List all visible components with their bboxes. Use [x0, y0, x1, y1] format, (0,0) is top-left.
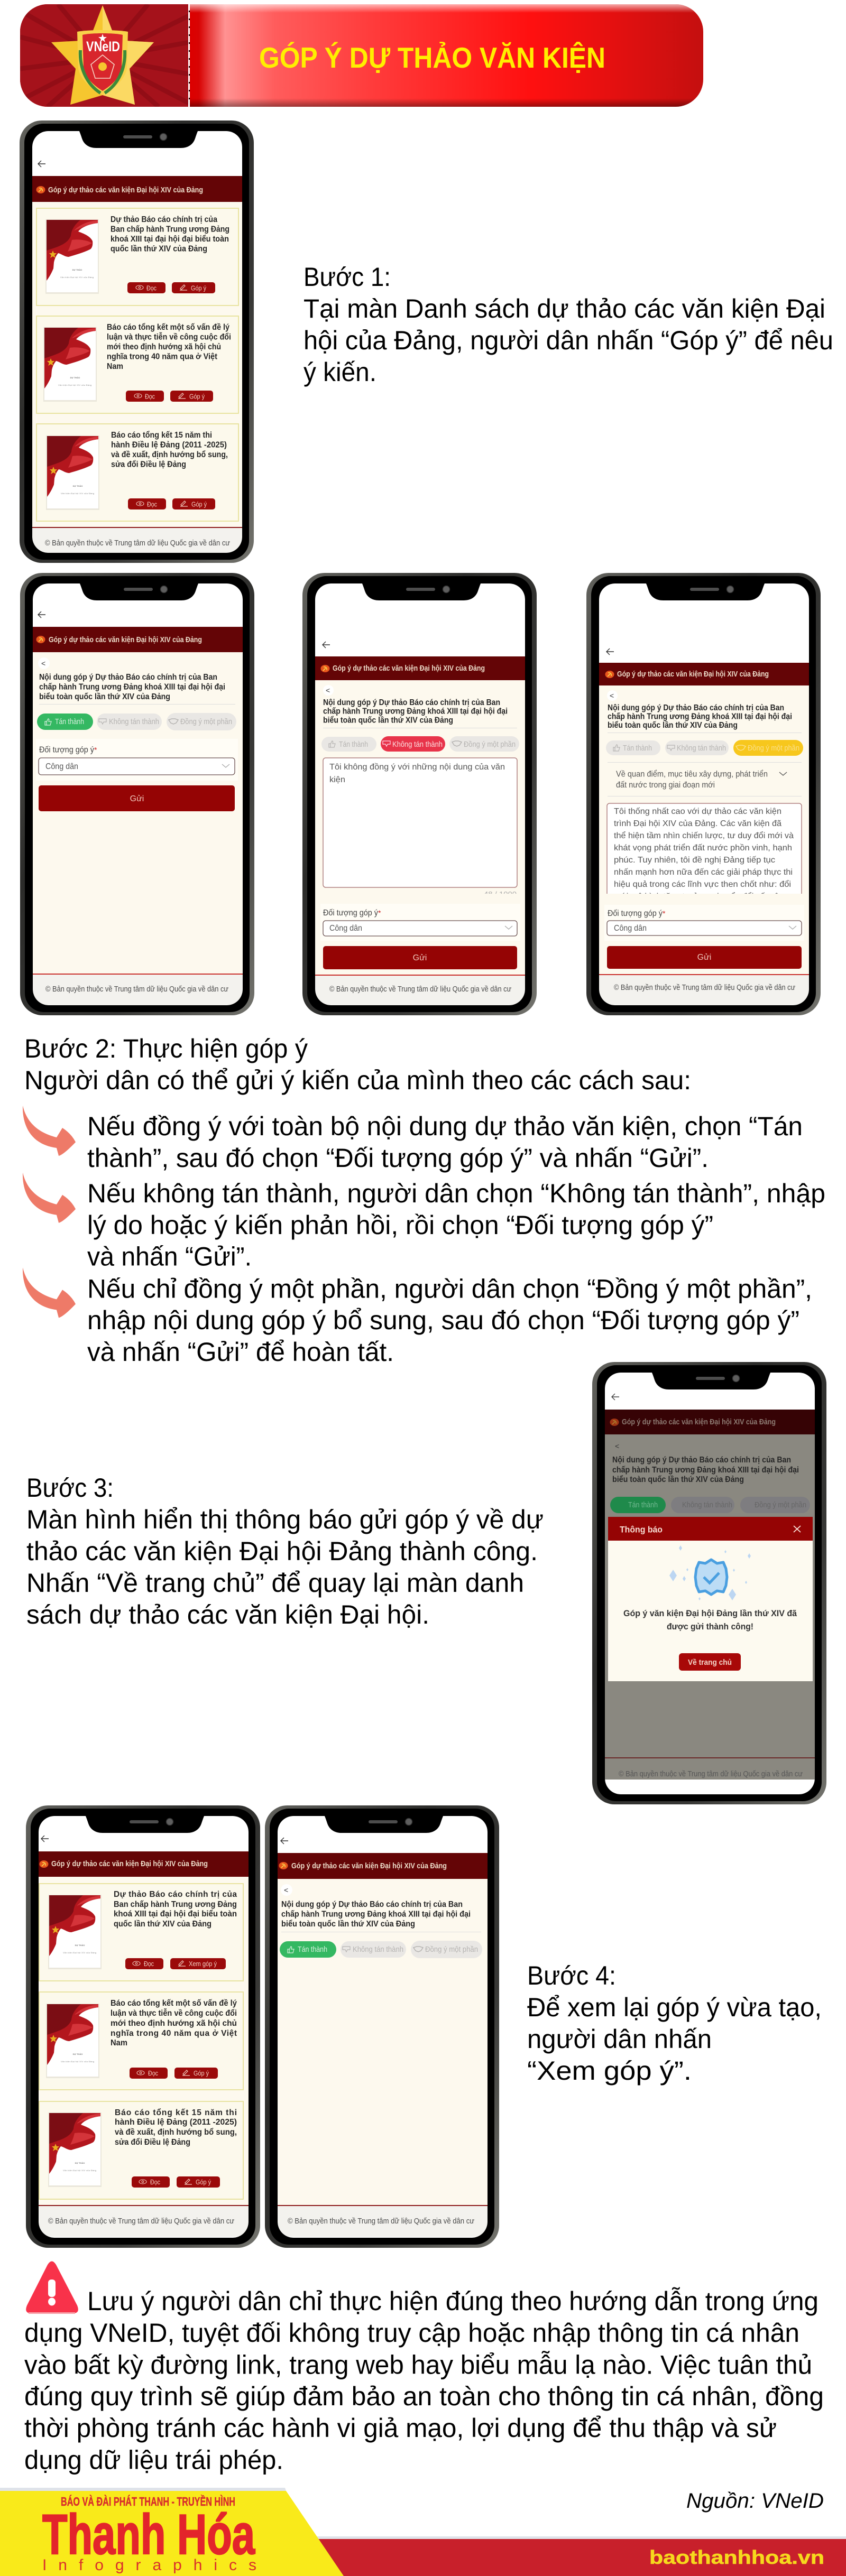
text: option disagree: Nếu không tán thành, người dân chọn “Không tán thành”, nhập	[87, 1179, 825, 1208]
app header bar	[33, 627, 243, 652]
text: option disagree: lý do hoặc ý kiến phản hồi, rồi chọn “Đối tượng góp ý”	[87, 1210, 713, 1240]
app footer: © Bản quyền thuộc về Trung tâm dữ liệu Quốc gia về dân cư	[45, 985, 228, 994]
form title: biểu toàn quốc lần thứ XIV của Đảng	[323, 716, 453, 725]
app header bar: Góp ý dự thảo các văn kiện Đại hội XIV của Đảng	[51, 1859, 208, 1868]
comment textarea: Tôi thống nhất cao với dự thảo các văn kiện	[614, 807, 781, 816]
dimmed pills	[610, 1497, 810, 1513]
icon: warning triangle	[26, 2261, 78, 2314]
card: party charter report: Văn kiện Đại hội XIV của Đảng	[61, 492, 94, 495]
section selector: đất nước trong giai đoạn mới	[616, 781, 715, 790]
target selector: Đối tượng góp ý	[39, 745, 94, 755]
title banner	[20, 4, 703, 107]
card: party charter report	[39, 2101, 243, 2199]
target selector: *	[378, 909, 381, 917]
dimmed pills: Không tán thành	[682, 1501, 732, 1509]
option pills: Đồng ý một phần	[180, 718, 232, 726]
text: step 3: thảo các văn kiện Đại hội Đảng thành công.	[26, 1536, 538, 1566]
app footer: © Bản quyền thuộc về Trung tâm dữ liệu Quốc gia về dân cư	[329, 985, 511, 994]
option pills	[606, 740, 803, 756]
text: warning note	[24, 2286, 824, 2475]
icon: VNeID star emblem	[51, 5, 154, 105]
card: 40 years report	[39, 1992, 243, 2090]
card: political report: khoá XIII tại đại hội đại biểu toàn	[111, 235, 229, 244]
card: political report: Đọc	[144, 1960, 154, 1968]
send button	[39, 785, 235, 811]
card: political report: quốc lần thứ XIV của Đảng	[111, 244, 207, 254]
target selector	[36, 739, 238, 781]
card: 40 years report	[36, 316, 238, 413]
card: political report: DỰ THẢO	[75, 1944, 85, 1947]
card: political report: Đọc	[146, 284, 157, 292]
app footer: © Bản quyền thuộc về Trung tâm dữ liệu Quốc gia về dân cư	[45, 539, 230, 548]
card: 40 years report: Góp ý	[194, 2069, 209, 2077]
card: 40 years report: Đọc	[145, 392, 155, 401]
dimmed header bar	[605, 1410, 815, 1434]
app footer: © Bản quyền thuộc về Trung tâm dữ liệu Quốc gia về dân cư	[48, 2217, 234, 2226]
phone: success dialog	[592, 1362, 826, 1804]
app footer: © Bản quyền thuộc về Trung tâm dữ liệu Quốc gia về dân cư	[614, 984, 795, 992]
icon: VNeID star emblem: VNeID	[86, 39, 120, 54]
phone: submitted comment view	[265, 1805, 499, 2248]
text: step 1: ý kiến.	[304, 357, 376, 387]
text: step 1	[304, 262, 833, 387]
card: party charter report: hành Điều lệ Đảng (2011 -2025)	[115, 2118, 237, 2127]
app footer	[277, 2205, 488, 2237]
form title: biểu toàn quốc lần thứ XIV của Đảng	[39, 692, 170, 701]
logo text: Thanh Hóa	[42, 2503, 255, 2566]
text: step 3: Nhấn “Về trang chủ” để quay lại màn danh	[26, 1568, 524, 1598]
comment textarea: trình Đại hội XIV của Đảng. Các văn kiện đã	[614, 819, 781, 828]
section selector	[616, 770, 787, 790]
card: political report: quốc lần thứ XIV của Đảng	[114, 1920, 212, 1929]
app header bar	[277, 1853, 488, 1879]
card: party charter report: Báo cáo tổng kết 15 năm thi	[111, 431, 212, 440]
option pills: Không tán thành	[677, 744, 726, 753]
comment textarea: khát vọng phát triển đất nước phồn vinh, hạnh	[614, 843, 792, 853]
app footer	[599, 974, 809, 1005]
form title: Nội dung góp ý Dự thảo Báo cáo chính trị của Ban	[281, 1900, 463, 1909]
dialog: Về trang chủ	[688, 1658, 732, 1667]
comment textarea: hiệu quả trong các lĩnh vực then chốt như: đổi	[614, 879, 791, 889]
comment textarea: thể hiện tầm nhìn chiến lược, tư duy đổi mới và	[614, 831, 794, 840]
send button: Gửi	[697, 953, 711, 962]
target selector: *	[663, 909, 666, 918]
card: 40 years report: nghĩa trong 40 năm qua ở Việt	[107, 352, 217, 362]
dimmed title	[612, 1456, 799, 1484]
text: warning note: thời phòng tránh các hành vi giả mạo, lợi dụng để thu thập và sử	[24, 2413, 777, 2443]
text: step 2 intro: Bước 2: Thực hiện góp ý	[24, 1034, 308, 1063]
card: 40 years report: Văn kiện Đại hội XIV của Đảng	[58, 384, 91, 386]
option pills: Đồng ý một phần	[425, 1945, 478, 1954]
send button: Gửi	[130, 794, 144, 803]
text: option partial: Nếu chỉ đồng ý một phần, người dân chọn “Đồng ý một phần”,	[87, 1274, 812, 1303]
form title: Nội dung góp ý Dự thảo Báo cáo chính trị của Ban	[323, 698, 500, 707]
target selector: *	[94, 745, 97, 754]
dimmed title: chấp hành Trung ương Đảng khoá XIII tại đại hội đại	[612, 1466, 799, 1475]
text: step 3	[26, 1473, 544, 1629]
card: 40 years report: luận và thực tiễn về công cuộc đổi	[111, 2009, 237, 2018]
card: political report: Dự thảo Báo cáo chính trị của	[114, 1890, 237, 1899]
logo text: BÁO VÀ ĐÀI PHÁT THANH - TRUYỀN HÌNH	[61, 2494, 235, 2508]
heading: GÓP Ý DỰ THẢO VĂN KIỆN	[259, 41, 605, 74]
app header bar	[32, 176, 242, 202]
form title: Nội dung góp ý Dự thảo Báo cáo chính trị của Ban	[39, 673, 217, 682]
card: party charter report: hành Điều lệ Đảng (2011 -2025)	[111, 441, 227, 449]
text: step 4: người dân nhấn	[527, 2024, 712, 2054]
logo text	[42, 2494, 256, 2574]
text: step 2 intro	[24, 1034, 691, 1095]
text: step 4: Bước 4:	[527, 1961, 616, 1990]
dialog: được gửi thành công!	[667, 1622, 753, 1632]
target selector: Công dân	[614, 924, 647, 933]
card: 40 years report: Văn kiện Đại hội XIV của Đảng	[61, 2060, 94, 2063]
card: party charter report: Đọc	[147, 500, 157, 508]
footer brand band	[0, 2488, 846, 2576]
send button	[323, 946, 517, 969]
card: 40 years report: DỰ THẢO	[70, 376, 80, 379]
card: party charter report: DỰ THẢO	[75, 2162, 85, 2164]
form title: chấp hành Trung ương Đảng khoá XIII tại đại hội đại	[39, 683, 225, 691]
text: step 2 intro: Người dân có thể gửi ý kiến của mình theo các cách sau:	[24, 1065, 691, 1095]
card: party charter report: DỰ THẢO	[73, 485, 82, 487]
card: 40 years report: DỰ THẢO	[73, 2053, 82, 2055]
option pills	[321, 736, 519, 752]
card: political report: Góp ý	[191, 284, 206, 292]
text: step 4	[527, 1961, 822, 2086]
card: political report: Xem góp ý	[189, 1960, 217, 1968]
phone: list with view comment	[26, 1805, 260, 2248]
app footer	[39, 2205, 249, 2237]
option pills: Tán thành	[623, 744, 652, 753]
card: 40 years report: Báo cáo tổng kết một số vấn đề lý	[111, 1999, 237, 2008]
dimmed title: biểu toàn quốc lần thứ XIV của Đảng	[612, 1475, 744, 1484]
form title: biểu toàn quốc lần thứ XIV của Đảng	[608, 721, 738, 730]
card: party charter report	[36, 424, 238, 521]
phone: disagree form: <	[326, 686, 330, 694]
card: 40 years report: mới theo định hướng xã hội chủ	[107, 342, 221, 351]
text: step 1: hội của Đảng, người dân nhấn “Góp ý” để nêu	[304, 326, 833, 355]
text: warning note: vào bất kỳ đường link, trang web hay biểu mẫu lạ nào. Việc tuân thủ	[24, 2350, 812, 2379]
card: 40 years report: Đọc	[148, 2069, 158, 2077]
app footer	[33, 974, 243, 1005]
form title	[323, 698, 508, 725]
app header bar: Góp ý dự thảo các văn kiện Đại hội XIV của Đảng	[49, 635, 202, 644]
phone: partial agree form	[586, 573, 821, 1015]
card: party charter report: Báo cáo tổng kết 15 năm thi	[115, 2108, 237, 2117]
app header bar: Góp ý dự thảo các văn kiện Đại hội XIV của Đảng	[48, 186, 203, 194]
card: 40 years report: Góp ý	[189, 392, 205, 401]
send button	[607, 946, 802, 969]
app header bar: Góp ý dự thảo các văn kiện Đại hội XIV của Đảng	[291, 1861, 447, 1870]
phone: agree form	[20, 573, 254, 1015]
card: party charter report: sửa đổi Điều lệ Đảng	[111, 460, 186, 469]
card: political report: Ban chấp hành Trung ương Đảng	[111, 225, 229, 234]
card: political report	[39, 1884, 243, 1981]
phone: document list	[20, 121, 254, 563]
comment textarea	[606, 803, 802, 894]
app footer	[315, 975, 525, 1005]
comment textarea: Tôi không đồng ý với những nội dung của văn	[329, 763, 505, 772]
text: step 1: Tại màn Danh sách dự thảo các văn kiện Đại	[304, 294, 825, 323]
target selector: Công dân	[45, 762, 78, 771]
comment textarea: nhấn mạnh hơn nữa đến các giải pháp thực thi	[614, 868, 793, 877]
form title	[39, 673, 225, 701]
form title: biểu toàn quốc lần thứ XIV của Đảng	[281, 1920, 415, 1929]
card: party charter report: Góp ý	[196, 2178, 211, 2186]
comment textarea: kiện	[329, 775, 345, 784]
option pills	[37, 713, 236, 730]
option pills	[280, 1941, 482, 1958]
text: step 3: Màn hình hiển thị thông báo gửi góp ý về dự	[26, 1505, 544, 1534]
option pills: Tán thành	[339, 740, 368, 749]
card: 40 years report: Nam	[107, 362, 123, 371]
card: political report: DỰ THẢO	[72, 268, 82, 271]
card: 40 years report: nghĩa trong 40 năm qua ở Việt	[111, 2029, 237, 2038]
source credit: Nguồn: VNeID	[686, 2489, 824, 2513]
form title	[281, 1900, 471, 1929]
text: step 4: “Xem góp ý”.	[527, 2056, 692, 2086]
app footer: © Bản quyền thuộc về Trung tâm dữ liệu Quốc gia về dân cư	[288, 2217, 474, 2226]
logo text: Infographics	[42, 2556, 256, 2574]
card: party charter report: Góp ý	[191, 500, 207, 508]
phone: partial agree form: <	[610, 691, 614, 700]
card: political report: Văn kiện Đại hội XIV của Đảng	[60, 276, 94, 279]
text: step 3: Bước 3:	[26, 1473, 114, 1503]
dialog: Góp ý văn kiện Đại hội Đảng lần thứ XIV đã	[623, 1609, 797, 1618]
text: warning note: đúng quy trình sẽ giúp đảm bảo an toàn cho thông tin cá nhân, đồng	[24, 2382, 824, 2411]
icon: arrow bullet 2	[23, 1173, 76, 1223]
target selector	[320, 904, 520, 941]
card: party charter report: và đề xuất, định hướng bổ sung,	[111, 450, 228, 459]
text: step 4: Để xem lại góp ý vừa tạo,	[527, 1993, 822, 2022]
app footer	[32, 527, 242, 553]
section selector: Về quan điểm, mục tiêu xây dựng, phát triển	[616, 770, 768, 779]
phone: agree form: <	[41, 659, 45, 668]
send button: Gửi	[413, 953, 427, 962]
icon: arrow bullet 3	[23, 1267, 76, 1318]
card: political report: Ban chấp hành Trung ương Đảng	[114, 1900, 237, 1909]
text: warning note: dụng dữ liệu trái phép.	[24, 2445, 283, 2475]
card: 40 years report: luận và thực tiễn về công cuộc đổi	[107, 333, 231, 341]
option pills: Không tán thành	[392, 740, 443, 749]
app header bar	[39, 1851, 249, 1877]
app header bar: Góp ý dự thảo các văn kiện Đại hội XIV của Đảng	[333, 664, 485, 673]
dialog: Thông báo	[620, 1524, 663, 1535]
text: option disagree: và nhấn “Gửi”.	[87, 1242, 252, 1272]
comment textarea	[323, 758, 521, 900]
text: option partial: nhập nội dung góp ý bổ sung, sau đó chọn “Đối tượng góp ý”	[87, 1305, 799, 1335]
text: option disagree	[87, 1179, 825, 1272]
card: party charter report: Đọc	[150, 2178, 160, 2186]
option pills: Không tán thành	[353, 1945, 403, 1954]
form title: chấp hành Trung ương Đảng khoá XIII tại đại hội đại	[281, 1910, 471, 1919]
option pills: Đồng ý một phần	[748, 744, 799, 753]
form title: chấp hành Trung ương Đảng khoá XIII tại đại hội đại	[323, 707, 508, 716]
text: option approve: Nếu đồng ý với toàn bộ nội dung dự thảo văn kiện, chọn “Tán	[87, 1111, 803, 1141]
dialog	[608, 1517, 813, 1681]
text: step 3: sách dự thảo các văn kiện Đại hội.	[26, 1600, 429, 1629]
target selector: Công dân	[329, 924, 362, 933]
text: warning note: Lưu ý người dân chỉ thực hiện đúng theo hướng dẫn trong ứng	[87, 2286, 819, 2316]
card: party charter report: sửa đổi Điều lệ Đảng	[115, 2138, 190, 2147]
website: baothanhhoa.vn	[649, 2546, 824, 2568]
app header bar	[315, 656, 525, 680]
dimmed header bar: Góp ý dự thảo các văn kiện Đại hội XIV của Đảng	[622, 1417, 776, 1426]
option pills: Không tán thành	[109, 718, 159, 726]
form title: Nội dung góp ý Dự thảo Báo cáo chính trị của Ban	[608, 703, 784, 712]
card: party charter report: và đề xuất, định hướng bổ sung,	[115, 2128, 237, 2137]
card: 40 years report: mới theo định hướng xã hội chủ	[111, 2019, 237, 2028]
dimmed pills: Tán thành	[628, 1501, 658, 1509]
card: party charter report: Văn kiện Đại hội XIV của Đảng	[63, 2169, 96, 2172]
option pills: Đồng ý một phần	[464, 740, 516, 749]
target selector: Đối tượng góp ý	[323, 909, 378, 918]
icon: arrow bullet 1	[23, 1106, 76, 1156]
card: political report: Văn kiện Đại hội XIV của Đảng	[63, 1951, 96, 1954]
icon: verified badge	[669, 1545, 751, 1600]
form title	[608, 703, 792, 730]
card: 40 years report: Nam	[111, 2038, 127, 2047]
comment textarea: phúc. Tuy nhiên, tôi đề nghị Đảng tiếp tục	[614, 856, 775, 865]
option pills: Tán thành	[298, 1945, 327, 1954]
card: political report	[36, 208, 238, 305]
card: 40 years report: Báo cáo tổng kết một số vấn đề lý	[107, 323, 229, 332]
text: step 1: Bước 1:	[304, 262, 391, 292]
text: option partial	[87, 1274, 812, 1367]
app header bar: Góp ý dự thảo các văn kiện Đại hội XIV của Đảng	[617, 670, 769, 679]
text: warning note: dụng VNeID, tuyệt đối không truy cập hoặc nhập thông tin cá nhân	[24, 2318, 799, 2348]
card: political report: Dự thảo Báo cáo chính trị của	[111, 215, 217, 224]
text: option approve: thành”, sau đó chọn “Đối tượng góp ý” và nhấn “Gửi”.	[87, 1143, 709, 1173]
phone: submitted comment view: <	[284, 1886, 288, 1894]
phone: success dialog: <	[615, 1442, 619, 1450]
text: option approve	[87, 1111, 803, 1173]
option pills: Tán thành	[55, 718, 84, 726]
card: political report: khoá XIII tại đại hội đại biểu toàn	[114, 1910, 237, 1919]
target selector	[604, 905, 804, 941]
comment textarea: mới mô hình tăng trưởng, chuyển đổi số, nâng	[614, 892, 788, 901]
dimmed pills: Đồng ý một phần	[755, 1501, 806, 1509]
phone: disagree form	[302, 573, 537, 1015]
text: option partial: và nhấn “Gửi” để hoàn tất.	[87, 1337, 394, 1367]
app header bar	[599, 663, 809, 685]
comment textarea: 48 / 1000	[484, 890, 517, 898]
dimmed footer: © Bản quyền thuộc về Trung tâm dữ liệu Quốc gia về dân cư	[619, 1770, 803, 1778]
dimmed title: Nội dung góp ý Dự thảo Báo cáo chính trị của Ban	[612, 1456, 791, 1465]
target selector: Đối tượng góp ý	[608, 909, 663, 918]
form title: chấp hành Trung ương Đảng khoá XIII tại đại hội đại	[608, 712, 792, 721]
